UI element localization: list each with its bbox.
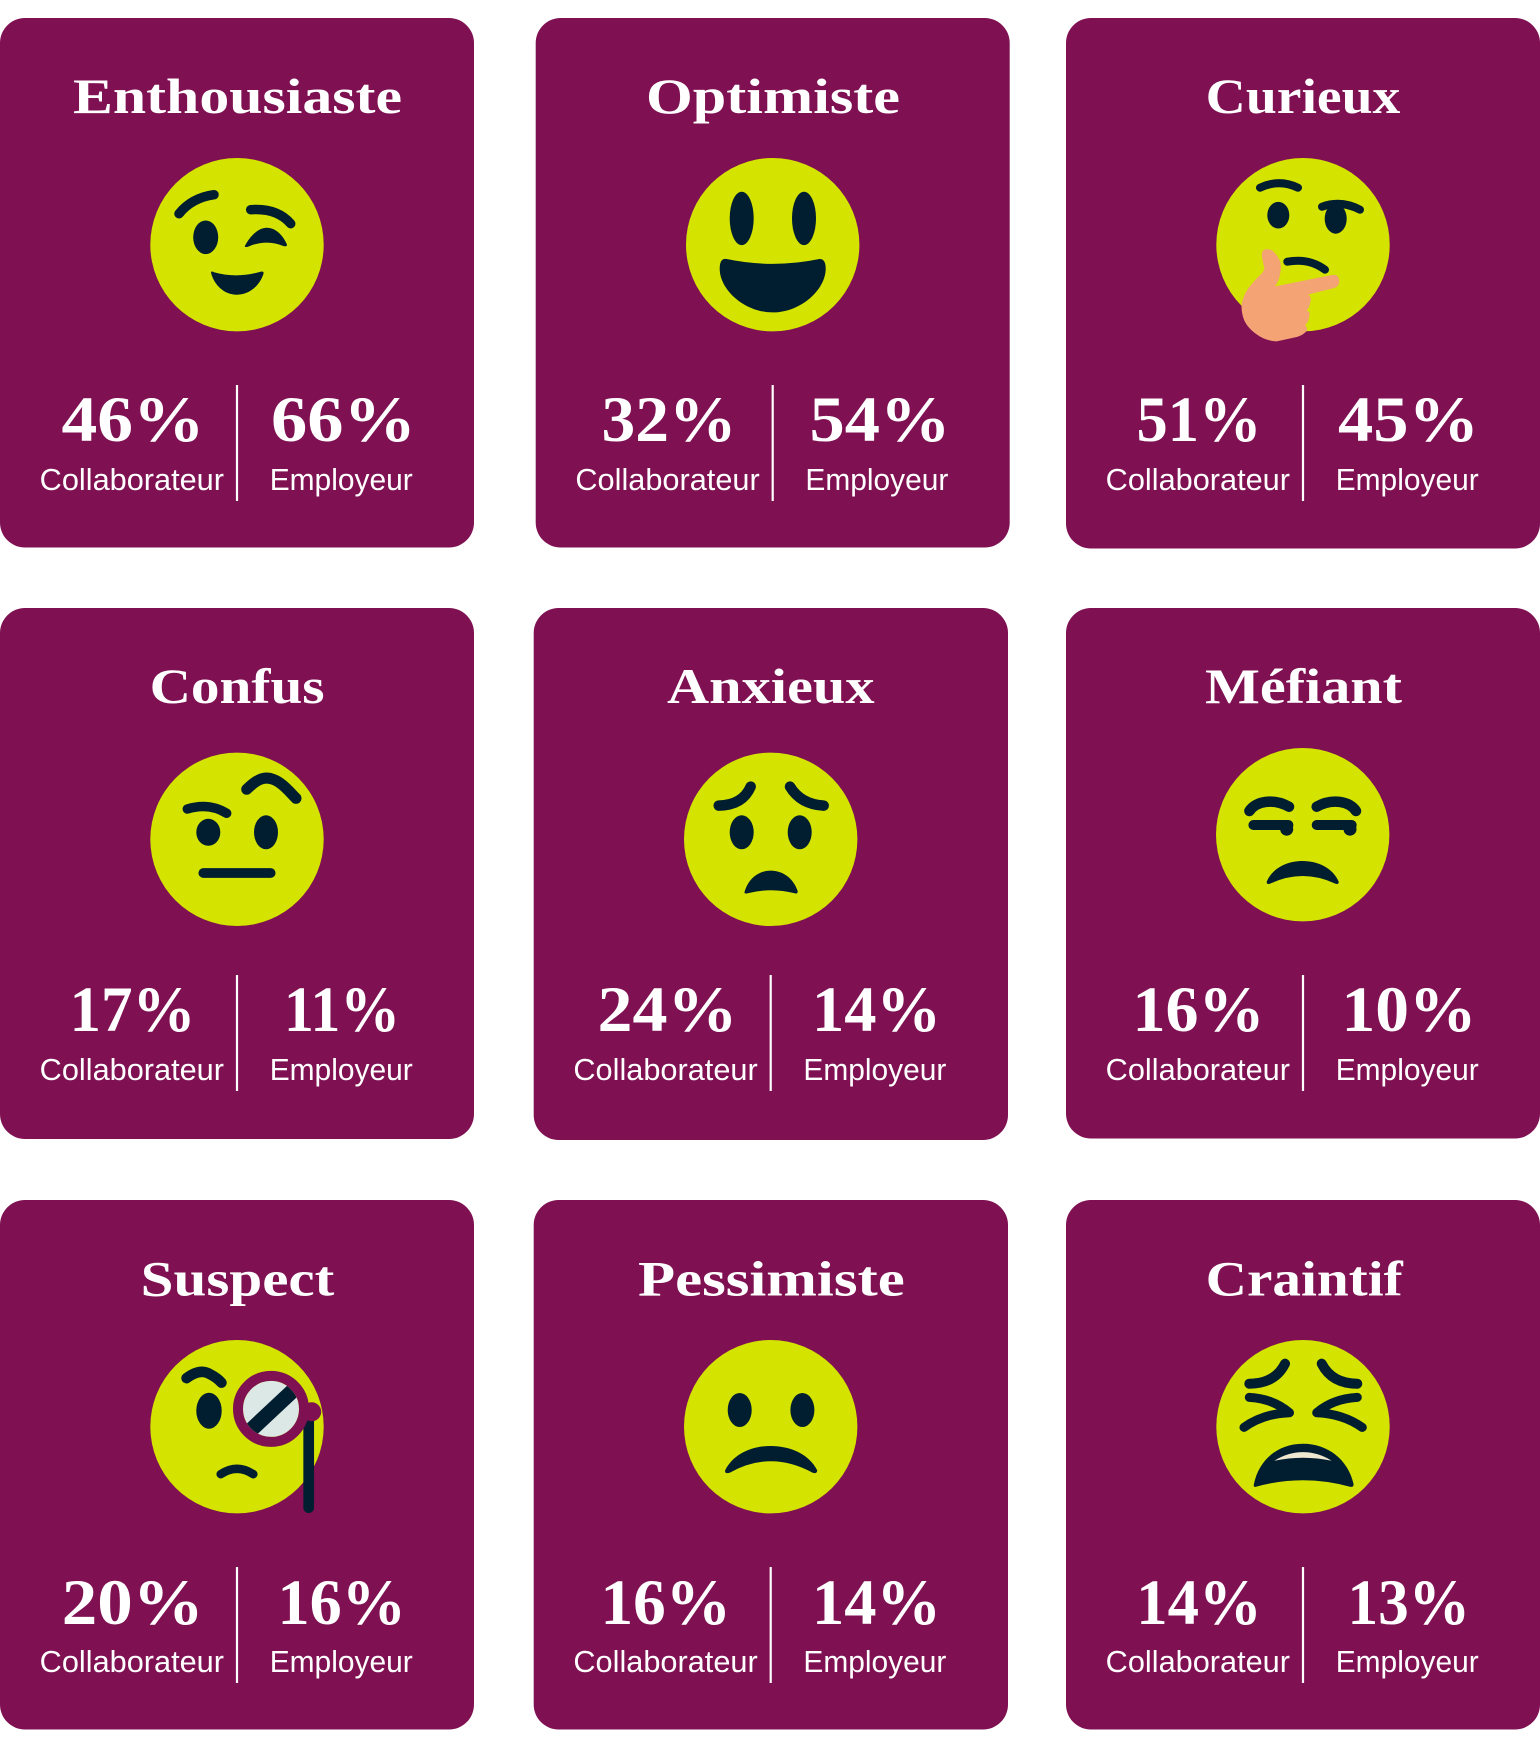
card background (536, 18, 1010, 548)
stat: collaborateur 17%: 17% (70, 974, 196, 1046)
stat: collaborateur 51%: 51% (1136, 384, 1262, 456)
label: collaborateur: Collaborateur (575, 463, 760, 497)
panel: Suspect (0, 1200, 474, 1730)
heading: Confus: Confus (150, 658, 325, 714)
label: employeur: Employeur (1336, 1645, 1479, 1679)
panel: Méfiant (1066, 608, 1540, 1138)
label: collaborateur: Collaborateur (40, 463, 224, 497)
icon: distrustful face (1216, 748, 1389, 921)
card background (1066, 18, 1540, 548)
stat: employeur 11%: 11% (284, 974, 400, 1046)
label: collaborateur: Collaborateur (1106, 1053, 1290, 1087)
stat: employeur 13%: 13% (1348, 1567, 1470, 1639)
icon: smiling face (686, 158, 859, 331)
panel: Enthousiaste (0, 18, 474, 548)
heading: Curieux: Curieux (1206, 68, 1400, 124)
icon: winking face (150, 158, 324, 331)
stat: collaborateur 20%: 20% (62, 1567, 204, 1639)
heading: Suspect: Suspect (141, 1250, 335, 1306)
label: employeur: Employeur (803, 1053, 946, 1087)
label: employeur: Employeur (270, 1645, 413, 1679)
label: employeur: Employeur (270, 1053, 413, 1087)
stat: collaborateur 14%: 14% (1136, 1567, 1262, 1639)
stat: employeur 54%: 54% (810, 384, 950, 456)
panel: Optimiste (536, 18, 1010, 548)
panel: Craintif (1066, 1200, 1540, 1730)
card background (1066, 1200, 1540, 1730)
stat: employeur 10%: 10% (1342, 974, 1476, 1046)
stat: collaborateur 16%: 16% (600, 1567, 731, 1639)
icon: face with monocle (150, 1340, 324, 1513)
heading: Enthousiaste: Enthousiaste (73, 68, 402, 124)
label: employeur: Employeur (1336, 463, 1479, 497)
stat: employeur 45%: 45% (1338, 384, 1479, 456)
card background (0, 1200, 474, 1730)
label: collaborateur: Collaborateur (40, 1053, 224, 1087)
stat: employeur 66%: 66% (271, 384, 416, 456)
heading: Pessimiste: Pessimiste (638, 1250, 905, 1306)
label: collaborateur: Collaborateur (1106, 1645, 1290, 1679)
panel: Curieux (1066, 18, 1540, 548)
label: employeur: Employeur (1336, 1053, 1479, 1087)
stat: employeur 14%: 14% (812, 1567, 941, 1639)
label: collaborateur: Collaborateur (1106, 463, 1290, 497)
heading: Anxieux: Anxieux (667, 658, 874, 714)
stat: collaborateur 46%: 46% (62, 384, 204, 456)
card background (1066, 608, 1540, 1138)
panel: Anxieux (534, 608, 1008, 1140)
panel: Pessimiste (534, 1200, 1008, 1730)
label: employeur: Employeur (270, 463, 413, 497)
label: employeur: Employeur (805, 463, 948, 497)
icon: frowning face (684, 1340, 857, 1513)
card background (534, 608, 1008, 1140)
icon: thinking face with hand (1216, 158, 1390, 341)
stat: employeur 16%: 16% (278, 1567, 406, 1639)
card background (534, 1200, 1008, 1730)
icon: fearful face (1216, 1340, 1390, 1513)
card background (0, 18, 474, 548)
heading: Optimiste: Optimiste (646, 68, 900, 124)
stat: collaborateur 32%: 32% (602, 384, 736, 456)
stat: collaborateur 24%: 24% (598, 974, 738, 1046)
label: collaborateur: Collaborateur (40, 1645, 224, 1679)
icon: confused face (150, 753, 324, 926)
card background (0, 608, 474, 1139)
heading: Méfiant: Méfiant (1205, 658, 1402, 714)
label: employeur: Employeur (803, 1645, 946, 1679)
stat: collaborateur 16%: 16% (1132, 974, 1264, 1046)
label: collaborateur: Collaborateur (573, 1645, 758, 1679)
label: collaborateur: Collaborateur (573, 1053, 758, 1087)
heading: Craintif: Craintif (1206, 1250, 1404, 1306)
stat: employeur 14%: 14% (812, 974, 941, 1046)
panel: Confus (0, 608, 474, 1139)
icon: anxious face (684, 753, 857, 926)
